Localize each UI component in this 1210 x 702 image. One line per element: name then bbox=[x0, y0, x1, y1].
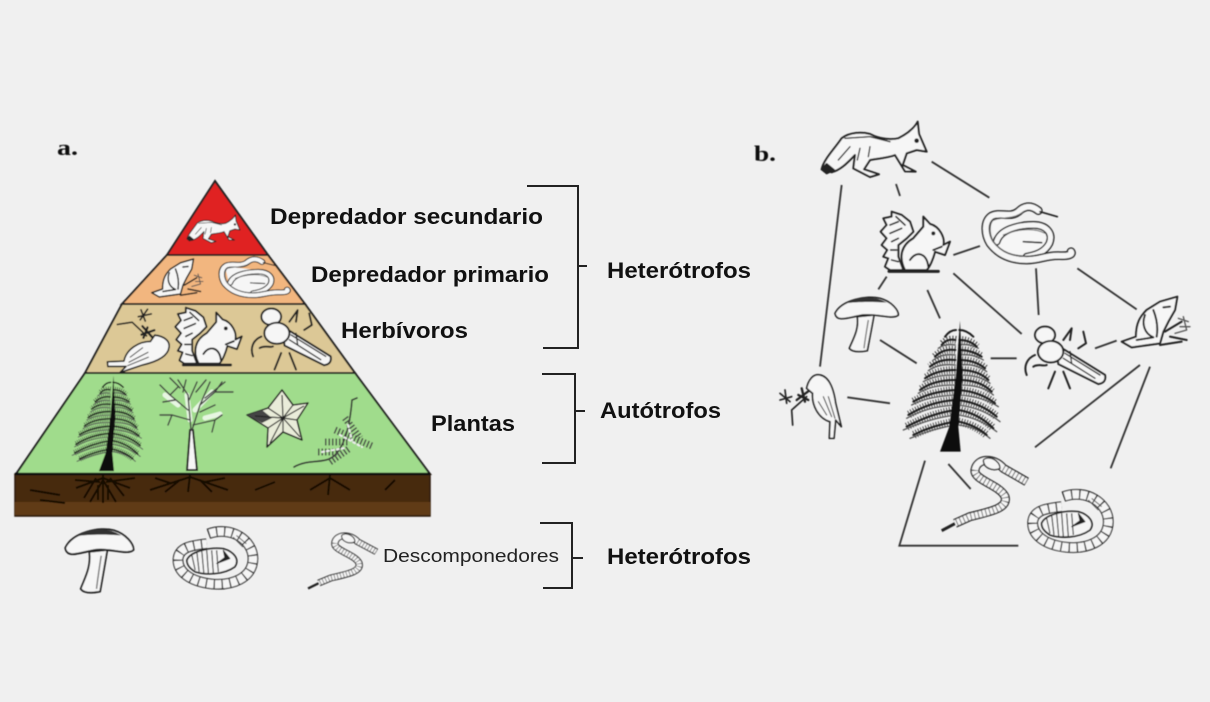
icon: moss plant bbox=[294, 398, 372, 467]
connection lines bbox=[820, 162, 1150, 546]
icon: snake bbox=[222, 259, 288, 295]
label: Depredador primario: Depredador primario bbox=[311, 262, 549, 287]
icon: frog bbox=[152, 259, 203, 297]
icon: bare tree bbox=[160, 378, 233, 470]
panel: a, trophic pyramid bbox=[15, 135, 430, 593]
icon: fox in red level bbox=[187, 215, 240, 243]
bracket: decomposers bbox=[540, 523, 583, 588]
label: Herbívoros: Herbívoros bbox=[341, 318, 468, 343]
icon: pine tree bbox=[903, 321, 1000, 452]
icon: squirrel bbox=[881, 212, 950, 271]
icon: pine tree bbox=[72, 376, 143, 471]
label: Heterótrofos bottom: Heterótrofos bbox=[607, 544, 751, 569]
icon: frog bbox=[1122, 297, 1190, 347]
pyramid level: herbivores (tan) bbox=[85, 304, 355, 374]
soil layer with roots bbox=[15, 474, 430, 516]
icon: earthworm bbox=[308, 534, 376, 588]
label: Descomponedores: Descomponedores bbox=[383, 546, 559, 566]
roots bbox=[30, 475, 395, 503]
pyramid level: primary predator (orange) bbox=[122, 255, 305, 304]
label: Depredador secundario: Depredador secundario bbox=[270, 204, 543, 229]
icon: bird bbox=[103, 308, 171, 374]
pyramid level: plants (green) bbox=[16, 373, 430, 474]
label: Heterótrofos top: Heterótrofos bbox=[607, 258, 751, 283]
bracket: consumers bbox=[527, 186, 587, 348]
icon: mushroom bbox=[835, 297, 898, 352]
label a: a. bbox=[57, 135, 78, 160]
bracket: plants bbox=[542, 374, 585, 463]
label: Plantas: Plantas bbox=[431, 411, 515, 436]
icon: fox bbox=[822, 122, 927, 177]
icon: bird bbox=[780, 375, 841, 438]
label b: b. bbox=[754, 141, 776, 166]
icon: beetle bbox=[252, 308, 331, 370]
icon: beetle bbox=[1025, 327, 1105, 388]
icon: snake bbox=[986, 207, 1071, 260]
icon: millipede bbox=[178, 531, 253, 584]
label: Autótrofos: Autótrofos bbox=[600, 398, 721, 423]
icon: earthworm bbox=[942, 458, 1027, 531]
pyramid level: secondary predator (red) bbox=[167, 181, 268, 255]
icon: flower bbox=[247, 390, 308, 447]
icon: millipede bbox=[1033, 494, 1108, 548]
food web network drawn in scaled coordinates bbox=[780, 122, 1190, 548]
icon: squirrel bbox=[175, 308, 242, 365]
panel: b, food web bbox=[754, 122, 1190, 548]
icon: mushroom bbox=[65, 529, 134, 593]
